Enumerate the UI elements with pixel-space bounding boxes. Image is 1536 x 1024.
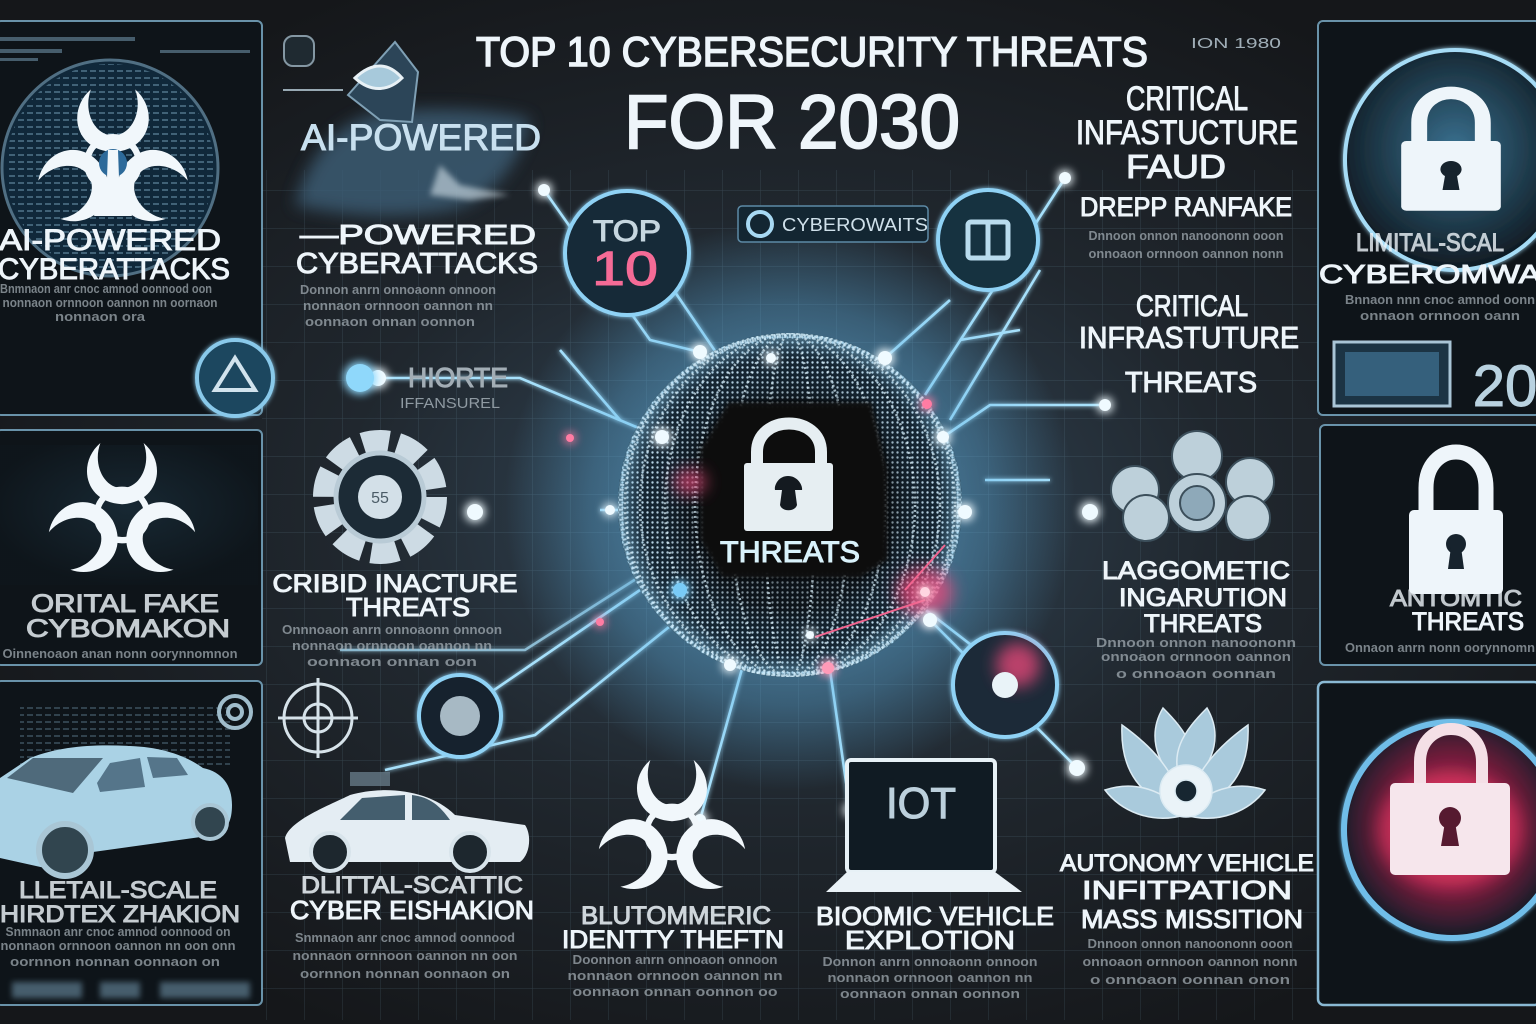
description: nonnaon ornnoon oannon nn — [568, 968, 783, 983]
icon: central padlock — [744, 424, 833, 531]
panel heading: ORITAL FAKE — [31, 590, 219, 618]
badge: cyberthreats label: CYBEROWAITS — [782, 215, 928, 235]
description: Dnnoon onnon nanoononn ooon — [1088, 228, 1284, 243]
description: Dnnoon onnon nanoononn — [1096, 635, 1296, 650]
block: critical infrastructure fraud — [1076, 80, 1298, 261]
panel: right bottom, red lock — [1318, 682, 1536, 1005]
description: o onnoaon oonnan onon — [1090, 972, 1290, 987]
description — [282, 622, 502, 669]
description: Donnon anrn onnoaonn onnoon — [822, 954, 1038, 969]
description: onnoaon ornnoon oannon — [1101, 649, 1291, 664]
panel description — [0, 281, 218, 324]
panel description: onnaon ornnoon oann — [1360, 308, 1520, 323]
panel description — [0, 924, 236, 969]
badge: cyberthreats label — [738, 206, 928, 242]
icon: red glowing lock — [1344, 722, 1536, 938]
description — [300, 282, 496, 329]
block: gear, critical infrastructure threats: CRIBID INACTURE — [272, 570, 518, 598]
icon: car — [0, 745, 232, 876]
central globe — [505, 220, 1075, 790]
icon: laptop screen — [1334, 342, 1450, 406]
pink glow accents — [674, 470, 953, 637]
block: powered cyberattacks: CYBERATTACKS — [296, 248, 538, 280]
panel description: nonnaon ornnoon oannon nn oornaon — [2, 295, 218, 310]
icon: car — [285, 772, 529, 871]
panel description: Onnaon anrn nonn oorynnomn — [1345, 640, 1535, 655]
block: autonomy vehicle: MASS MISSITION — [1081, 904, 1303, 934]
icon: biohazard — [42, 443, 202, 581]
glowing nodes — [346, 172, 1111, 826]
panel description: Snmnaon anr cnoc amnod oonnood on — [6, 924, 231, 939]
panel description — [1345, 292, 1535, 323]
panel: right middle, lock — [1320, 425, 1536, 665]
icon: gear: 55 — [371, 490, 389, 507]
description: nonnaon ornnoon oannon nn — [828, 970, 1033, 985]
block: remote infrastructure small label: IFFANSUREL — [400, 395, 500, 412]
description: nonnaon ornnoon oannon nn oon — [292, 948, 518, 963]
title: FOR 2030 — [624, 80, 960, 165]
description — [568, 952, 783, 999]
description: Donnon anrn onnoaonn onnoon — [300, 282, 496, 297]
block: lagometric threats: INGARUTION — [1119, 584, 1287, 612]
block: biomic vehicle exploitation — [816, 760, 1054, 1001]
icon: hooded AI figure collage — [283, 36, 530, 215]
block: gear, critical infrastructure threats: THREATS — [346, 592, 470, 622]
block: powered cyberattacks — [296, 219, 538, 329]
block: biomic vehicle exploitation: BIOOMIC VEHICLE — [816, 901, 1054, 931]
badge: top 10: TOP — [593, 215, 661, 248]
title: TOP 10 CYBERSECURITY THREATS — [476, 28, 1148, 75]
icon: pink network badge — [953, 633, 1057, 737]
panel heading: LLETAIL-SCALE — [19, 877, 217, 904]
description: oornnon nonnan oonnaon on — [300, 966, 510, 981]
description: nonnaon ornnoon oannon nn — [292, 638, 492, 653]
icon: lock — [1409, 452, 1503, 594]
description — [1082, 936, 1298, 987]
block: biometric identity theft — [562, 760, 784, 999]
block: autonomy vehicle — [1060, 708, 1314, 987]
description: nonnaon ornnoon oannon nn — [303, 298, 493, 313]
icon: round gauge badge — [419, 675, 501, 757]
description: Dnnoon onnon nanoononn ooon — [1088, 936, 1293, 951]
block: critical infrastructure threats: CRITICAL — [1136, 290, 1248, 323]
block: police car: CYBER EISHAKION — [290, 895, 534, 925]
title — [476, 28, 1148, 165]
panel heading: LIMITAL-SCAL — [1356, 229, 1504, 257]
icon: biohazard — [31, 89, 195, 231]
block: critical infrastructure fraud: FAUD — [1126, 148, 1226, 185]
panel description: Oinnenoaon anan nonn oorynnomnon — [2, 646, 238, 661]
description — [292, 930, 518, 981]
block: critical infrastructure fraud: CRITICAL — [1126, 80, 1248, 118]
block: lagometric threats — [1096, 431, 1296, 681]
panel: right top, lock — [1318, 21, 1536, 419]
icon: flower — [1105, 708, 1265, 818]
heading: AI-POWERED — [301, 117, 541, 158]
block: critical infrastructure threats — [1079, 290, 1299, 399]
block: critical infrastructure threats: INFRASTUTURE — [1079, 320, 1299, 355]
icon: glowing lock — [1345, 50, 1536, 270]
small code label: ION 1980 — [1191, 35, 1281, 52]
icon: IoT laptop — [826, 760, 1022, 892]
block: police car — [285, 772, 534, 981]
description: o onnoaon oonnan — [1116, 666, 1276, 681]
block: biometric identity theft: IDENTTY THEFTN — [562, 926, 784, 954]
panel: left bottom, car — [0, 681, 262, 1005]
panel description: Bnnaon nnn cnoc amnod oonn — [1345, 292, 1535, 307]
description: oonnaon onnan oon — [307, 654, 477, 669]
block: gear, critical infrastructure threats — [272, 444, 518, 669]
block: lagometric threats: LAGGOMETIC — [1102, 557, 1290, 585]
block: lagometric threats: THREATS — [1144, 610, 1262, 638]
description: Onnnoaon anrn onnoaonn onnoon — [282, 622, 502, 637]
block: AI-powered upper label — [283, 36, 541, 215]
panel description: oornnon nonnan oonnaon on — [10, 954, 220, 969]
panel: left middle, critical fake — [0, 430, 262, 665]
icon: cluster — [1111, 431, 1274, 541]
description: oonnaon onnan oonnon oo — [572, 984, 778, 999]
panel description: Bnmnaon anr cnoc amnod oonnood oon — [0, 281, 212, 296]
description — [1088, 228, 1284, 261]
panel description: nonnaon ornnoon oannon nn oon onn — [0, 938, 236, 953]
badge: document circle icon — [938, 190, 1038, 290]
dark lock plate — [700, 402, 888, 578]
badge: top 10: 10 — [592, 243, 658, 296]
block: biometric identity theft: BLUTOMMERIC — [581, 902, 771, 930]
icon: target reticle — [278, 678, 358, 758]
globe label: THREATS — [720, 536, 860, 569]
icon: small ring — [219, 696, 251, 728]
block: critical infrastructure fraud: DREPP RANFAKE — [1080, 192, 1292, 222]
panel: left middle, critical fake: CYBOMAKON — [26, 615, 230, 643]
description — [1096, 635, 1296, 681]
description: onnoaon ornnoon oannon nonn — [1082, 954, 1298, 969]
block: remote infrastructure small label: HIORTE — [408, 362, 508, 393]
circuit lines — [340, 178, 1105, 820]
panel: left top, AI-powered cyberattacks: CYBERATTACKS — [0, 253, 230, 286]
heading: —POWERED — [300, 219, 536, 250]
description: Snmnaon anr cnoc amnod oonnood — [295, 930, 515, 945]
block: autonomy vehicle: INFITPATION — [1082, 875, 1292, 905]
block: remote infrastructure small label — [400, 362, 508, 412]
panel: left top, AI-powered cyberattacks — [0, 21, 262, 415]
circular data backdrop — [2, 60, 218, 276]
block: critical infrastructure fraud: INFASTUCTURE — [1076, 114, 1298, 152]
panel heading: AI-POWERED — [0, 224, 221, 257]
panel heading: ANTOMTIC — [1390, 585, 1522, 611]
block: biomic vehicle exploitation: EXPLOTION — [845, 925, 1015, 955]
description: oonnaon onnan oonnon — [840, 986, 1020, 1001]
block: police car: DLITTAL-SCATTIC — [301, 872, 523, 899]
panel: left bottom, car: HIRDTEX ZHAKION — [0, 901, 240, 928]
description — [822, 954, 1038, 1001]
description: Doonnon anrn onnoaon onnoon — [572, 952, 778, 967]
block: autonomy vehicle: AUTONOMY VEHICLE — [1060, 850, 1314, 877]
badge: top 10 — [565, 191, 689, 315]
icon: biohazard — [592, 760, 752, 898]
description: onnoaon ornnoon oannon nonn — [1088, 246, 1284, 261]
panel description: nonnaon ora — [55, 309, 146, 324]
block: critical infrastructure threats: THREATS — [1125, 367, 1257, 399]
icon: left shield badge — [197, 340, 273, 416]
year label: 20 — [1473, 354, 1536, 419]
icon: IoT laptop: IOT — [886, 779, 956, 828]
icon: gear — [327, 444, 433, 550]
description: oonnaon onnan oonnon — [305, 314, 475, 329]
panel: right middle, lock: THREATS — [1412, 608, 1524, 636]
panel: right top, lock: CYBEROMWA — [1319, 259, 1536, 289]
